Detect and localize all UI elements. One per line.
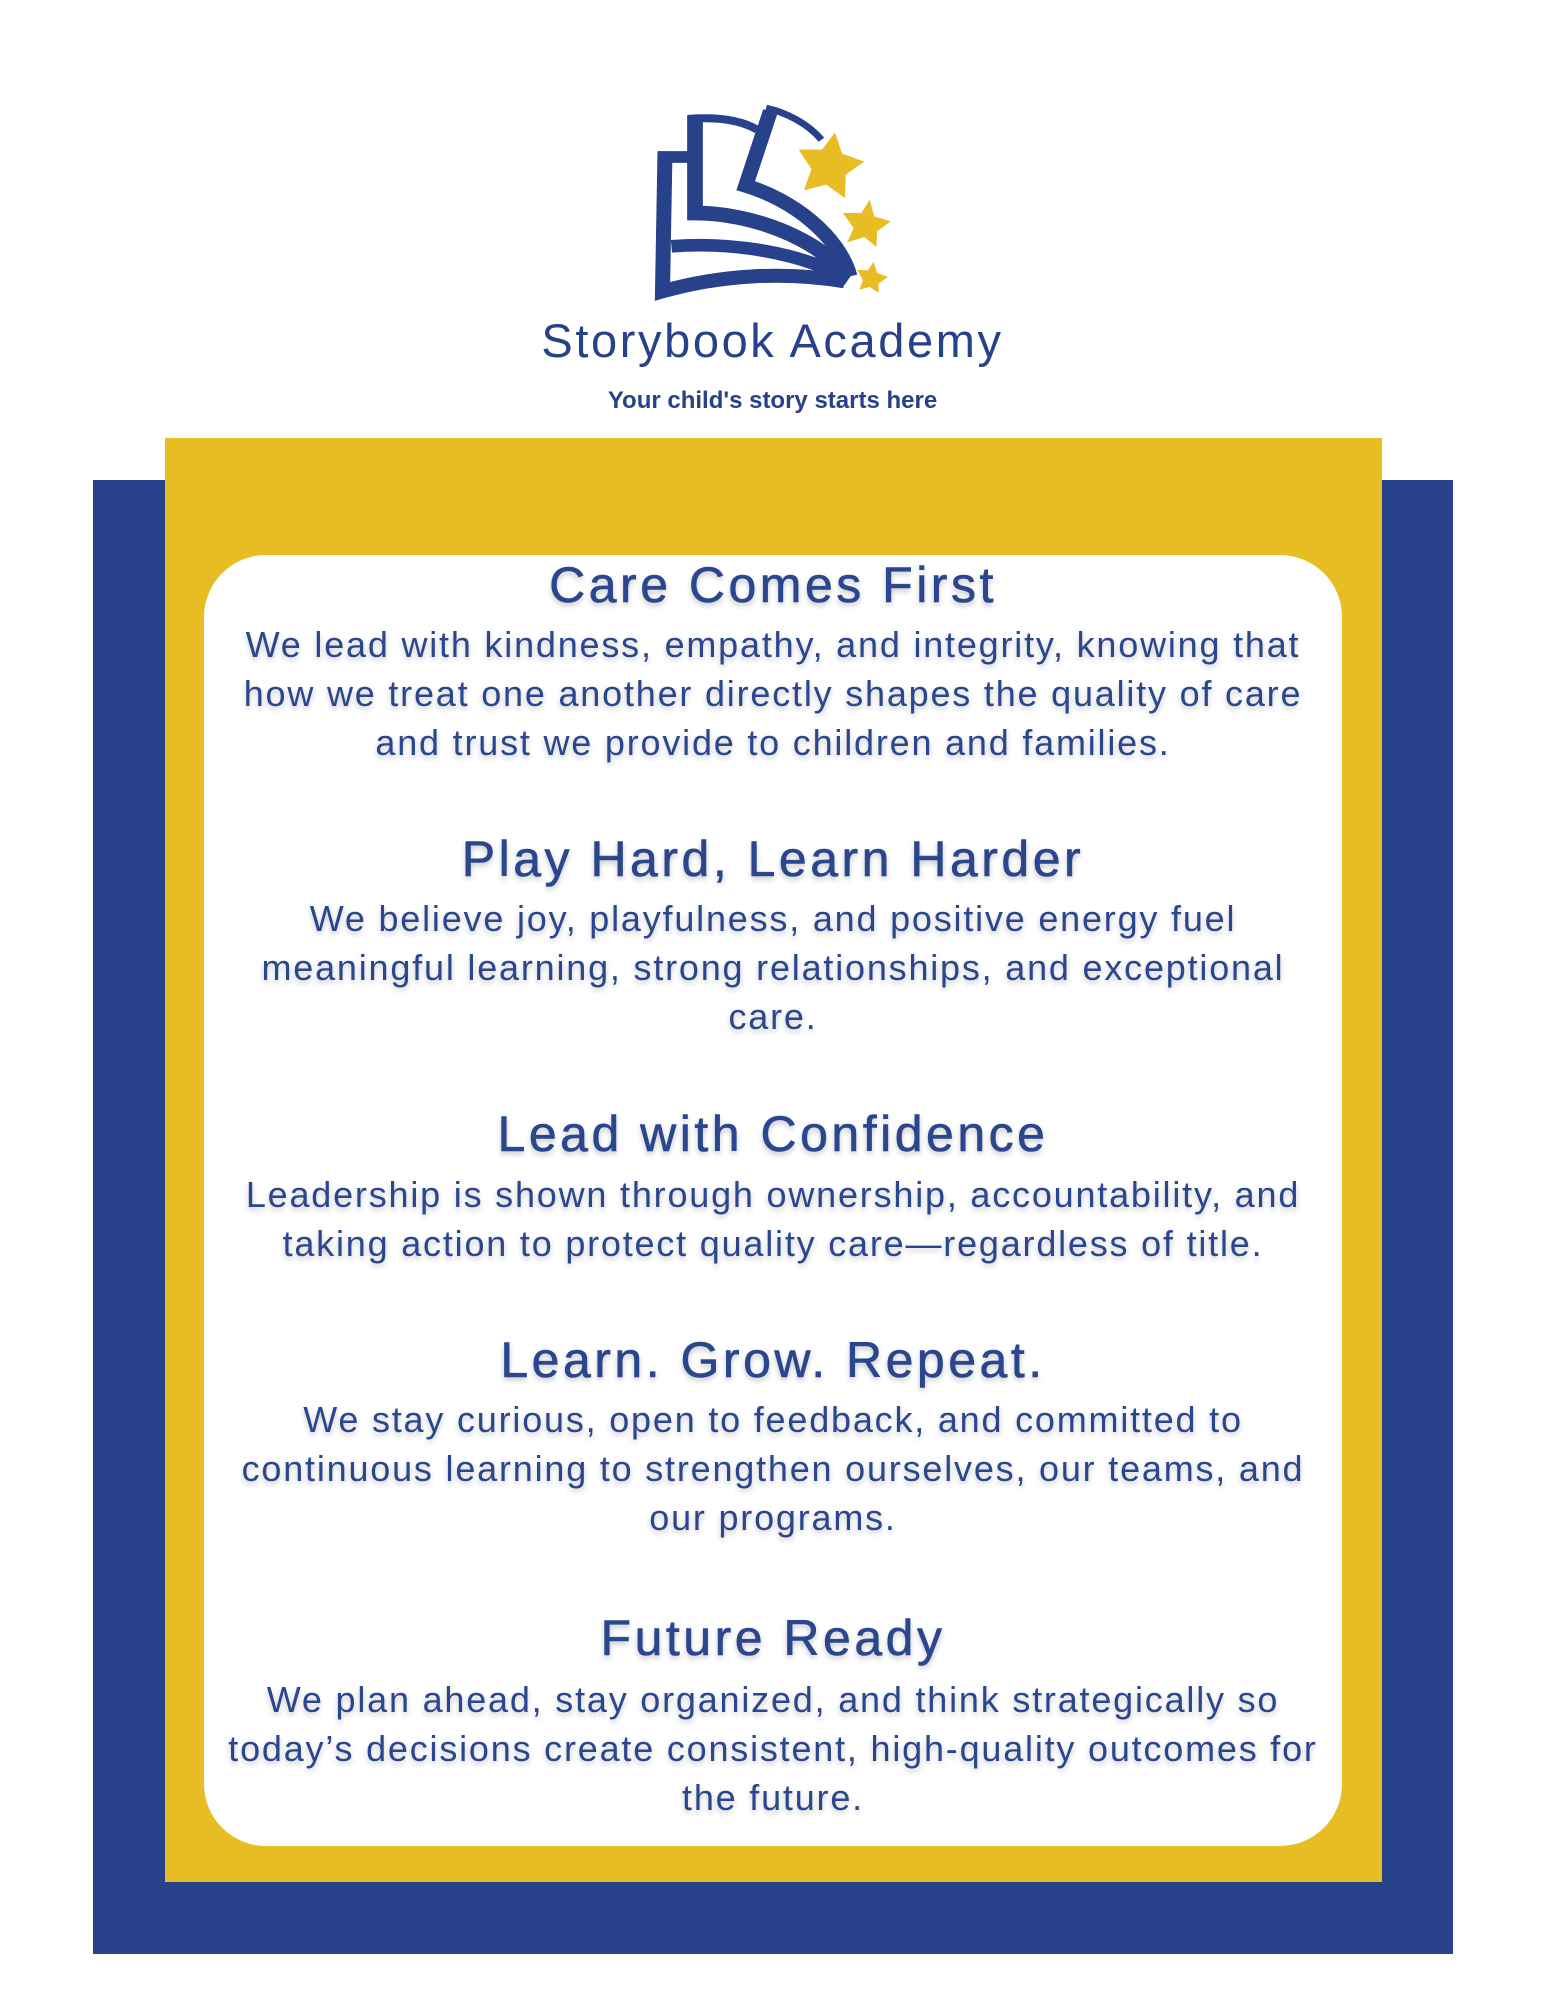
- section: Lead with Confidence: [246, 1106, 1300, 1268]
- body text: today’s decisions create consistent, high-quality outcomes for: [228, 1728, 1318, 1769]
- body text: [246, 1174, 1300, 1268]
- blue back panel: [93, 480, 1453, 1954]
- section: Care Comes First: [244, 557, 1302, 766]
- body text: taking action to protect quality care—regardless of title.: [283, 1223, 1263, 1264]
- body text: [228, 1679, 1318, 1818]
- heading: Care Comes First: [549, 557, 997, 613]
- tagline: Your child's story starts here: [608, 387, 937, 414]
- body text: [244, 624, 1302, 766]
- heading: Lead with Confidence: [498, 1106, 1048, 1162]
- title: Storybook Academy: [541, 314, 1004, 367]
- body text: [240, 1399, 1304, 1542]
- section: Learn. Grow. Repeat.: [240, 1332, 1304, 1542]
- icon: book logo with stars: [654, 104, 891, 301]
- heading: Learn. Grow. Repeat.: [500, 1332, 1046, 1388]
- body text: We believe joy, playfulness, and positive energy fuel: [310, 898, 1236, 939]
- body text: meaningful learning, strong relationships, and exceptional: [262, 947, 1284, 988]
- section: Play Hard, Learn Harder: [262, 831, 1284, 1037]
- body text: our programs.: [649, 1497, 897, 1538]
- section: Future Ready: [228, 1610, 1318, 1818]
- heading: Play Hard, Learn Harder: [462, 831, 1084, 887]
- body text: Leadership is shown through ownership, accountability, and: [246, 1174, 1300, 1215]
- body text: We lead with kindness, empathy, and integrity, knowing that: [246, 624, 1300, 665]
- yellow panel: [165, 438, 1382, 1882]
- body text: We stay curious, open to feedback, and committed to: [303, 1399, 1243, 1440]
- white content card: [204, 555, 1342, 1846]
- body text: [262, 898, 1284, 1037]
- body text: the future.: [682, 1777, 864, 1818]
- body text: care.: [728, 996, 818, 1037]
- body text: and trust we provide to children and families.: [375, 722, 1171, 763]
- body text: how we treat one another directly shapes the quality of care: [244, 673, 1302, 714]
- heading: Future Ready: [601, 1610, 945, 1666]
- body text: We plan ahead, stay organized, and think strategically so: [267, 1679, 1279, 1720]
- body text: continuous learning to strengthen ourselves, our teams, and: [242, 1448, 1304, 1489]
